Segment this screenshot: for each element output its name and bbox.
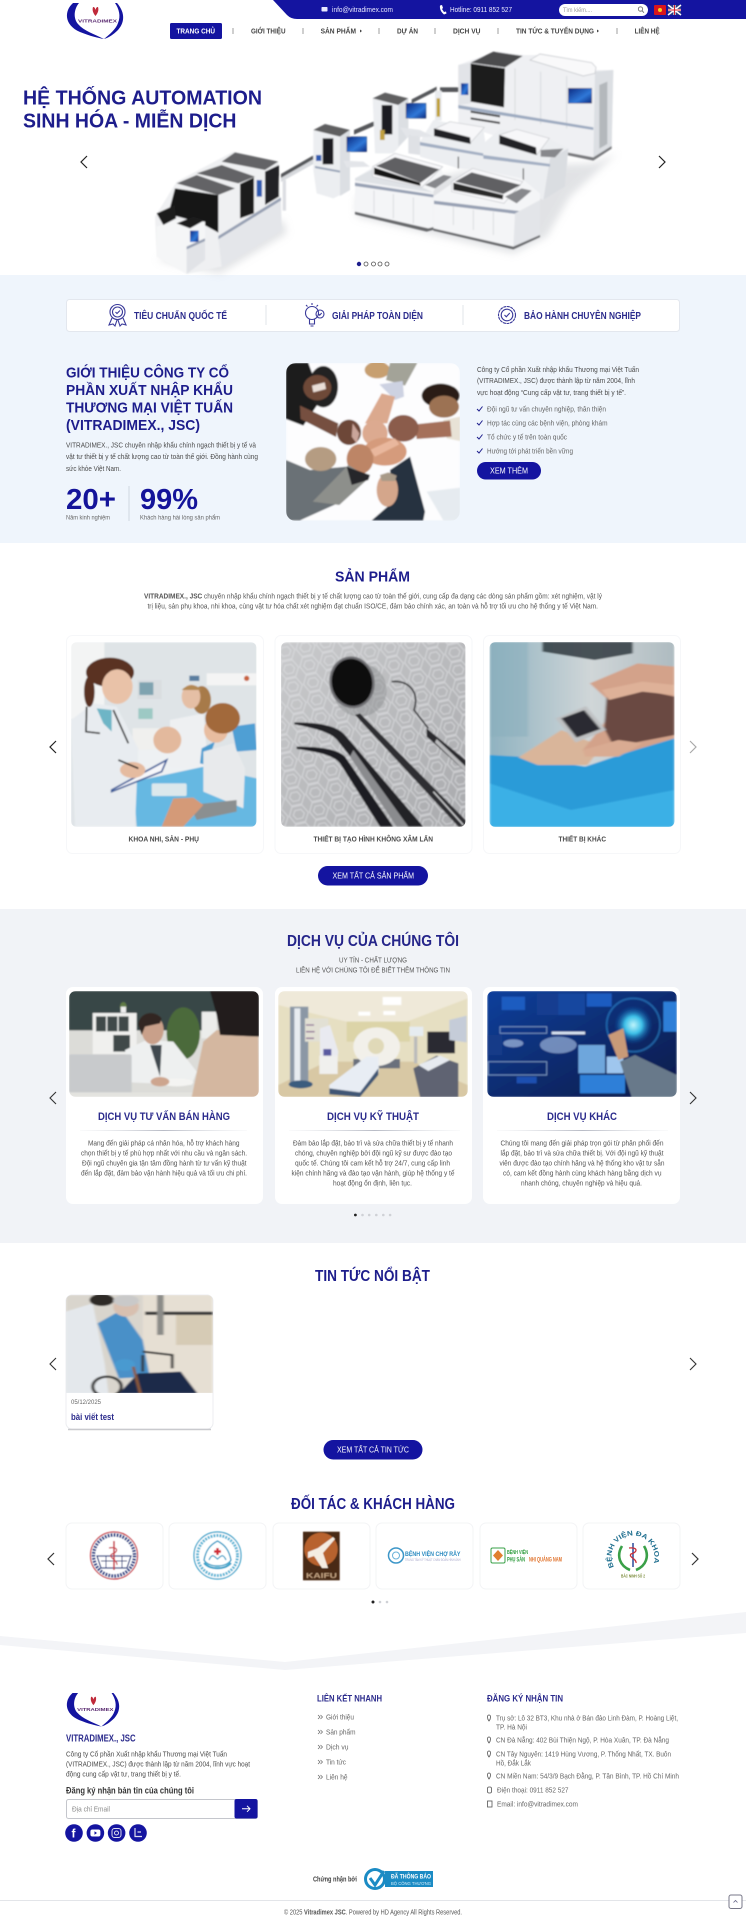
product card: other devices <box>484 636 680 854</box>
products description <box>144 592 602 610</box>
addresses: CN Đà Nẵng: 402 Bùi Thiện Ngộ, P. Hòa Xuân, TP. Đà Nẵng <box>496 1736 669 1744</box>
service description <box>500 1138 665 1188</box>
rear analyzers <box>420 120 568 200</box>
icon: check badge <box>498 306 516 324</box>
about heading: (VITRADIMEX., JSC) <box>66 417 200 434</box>
addresses: TP. Hà Nội <box>496 1722 527 1732</box>
nav items <box>233 27 660 36</box>
headline <box>23 86 262 133</box>
company text <box>66 1750 251 1779</box>
company text: Công ty Cổ phần Xuất nhập khẩu Thương mại Việt Tuấn <box>66 1750 227 1759</box>
button: all news <box>324 1440 422 1460</box>
product label: THIẾT BỊ KHÁC <box>558 834 607 844</box>
service description: Mang đến giải pháp cá nhân hóa, hỗ trợ khách hàng <box>88 1138 240 1148</box>
about description: vật tư thiết bị y tế chất lượng cao từ toàn thế giới. Đồng hành cùng <box>66 452 258 461</box>
service description: quốc tế. Chúng tôi cam kết hỗ trợ 24/7, cung cấp linh <box>295 1158 450 1168</box>
service description: đến lắp đặt, đảm bảo vận hành hiệu quả và tối ưu chi phí. <box>81 1168 247 1178</box>
about right column text: Công ty Cổ phần Xuất nhập khẩu Thương mại Việt Tuấn <box>477 365 639 374</box>
about heading: PHẦN XUẤT NHẬP KHẨU <box>66 381 233 399</box>
service description: Đội ngũ chuyên gia tận tâm đồng hành từ tư vấn kỹ thuật <box>82 1158 247 1168</box>
service title: DỊCH VỤ KỸ THUẬT <box>327 1110 419 1123</box>
stat: 99% satisfied: Khách hàng hài lòng sản phẩm <box>140 514 220 522</box>
footer company column <box>65 1693 258 1842</box>
icon: award ribbon <box>109 304 126 326</box>
about description: sức khỏe Việt Nam. <box>66 464 121 473</box>
about checklist: Tổ chức y tế trên toàn quốc <box>487 433 567 442</box>
products heading: SẢN PHẨM <box>335 568 410 586</box>
service description: có, cam kết đồng hành cùng khách hàng bằng dịch vụ <box>503 1168 662 1178</box>
logo: KAIFU: KAIFU <box>306 1573 337 1580</box>
service card: sales consulting <box>66 987 263 1204</box>
products description: VITRADIMEX., JSC chuyên nhập khẩu chính ngạch thiết bị y tế chất lượng cao từ toàn thế giới, cung cấp đa dạng các dòng sản phẩm gồm: xét nghiệm, vật lý <box>144 592 602 600</box>
addresses: Trụ sở: Lô 32 BT3, Khu nhà ở Bán đảo Linh Đàm, P. Hoàng Liệt, <box>496 1714 678 1722</box>
logo: obstetrics and pediatrics Quang Nam: NHI QUẢNG NAM <box>529 1554 562 1564</box>
nav items: LIÊN HỆ <box>635 27 660 36</box>
addresses: Điện thoại: 0911 852 527 <box>497 1786 568 1794</box>
floor shadows <box>157 153 617 273</box>
about heading: GIỚI THIỆU CÔNG TY CỔ <box>66 364 229 382</box>
company text: (VITRADIMEX., JSC) được thành lập từ năm 2004, lĩnh vực hoạt <box>66 1760 251 1769</box>
service description: kiện chính hãng và đào tạo vận hành, giúp hệ thống y tế <box>292 1168 455 1178</box>
photo: consultation <box>69 991 259 1097</box>
addresses: Hồ, Đắk Lắk <box>496 1758 531 1768</box>
icon: mail <box>322 7 328 12</box>
certification: Chứng nhận bởi <box>313 1876 357 1884</box>
logo: Cho Ray hospital: TRUNG TÂM KỸ THUẬT CHẨN ĐOÁN HÌNH ẢNH <box>405 1557 461 1562</box>
news heading: TIN TỨC NỔI BẬT <box>315 1266 430 1285</box>
carousel arrows: products <box>50 741 696 753</box>
nav items: SẢN PHẨM <box>321 27 356 36</box>
certification badge <box>364 1868 433 1890</box>
service title: DỊCH VỤ KHÁC <box>547 1110 617 1123</box>
active nav item: TRANG CHỦ <box>176 27 215 36</box>
carousel arrows: services <box>50 1092 696 1104</box>
logo: hospital 1 <box>90 1532 138 1579</box>
icons: locations <box>488 1715 492 1807</box>
about checklist: Đội ngũ tư vấn chuyên nghiệp, thân thiện <box>487 405 606 414</box>
search box: Tìm kiếm.... <box>563 8 592 14</box>
photo: CT scan room <box>278 991 468 1097</box>
certification badge: BỘ CÔNG THƯƠNG <box>391 1880 431 1886</box>
logo: obstetrics and pediatrics Quang Nam: BỆNH VIỆN <box>507 1548 528 1556</box>
footer logo: VITRADIMEX <box>77 1707 114 1712</box>
link list: Sản phẩm <box>326 1728 356 1737</box>
newsletter heading: Đăng ký nhận bản tin của chúng tôi <box>66 1786 194 1796</box>
partner cards row <box>66 1522 680 1590</box>
photo: doctor with child <box>71 642 257 827</box>
link list <box>326 1713 356 1782</box>
service description <box>81 1138 247 1178</box>
services pagination dots <box>354 1214 391 1216</box>
email: info@vitradimex.com <box>332 5 393 14</box>
service title: DỊCH VỤ TƯ VẤN BÁN HÀNG <box>98 1110 230 1123</box>
photo: digital dashboard <box>487 991 677 1097</box>
about checklist <box>477 405 608 456</box>
addresses: CN Miền Nam: 54/3/9 Bạch Đằng, P. Tân Bình, TP. Hồ Chí Minh <box>496 1772 679 1780</box>
stat: 99% satisfied: 99% <box>140 484 198 516</box>
front analyzer C <box>355 153 452 232</box>
newsletter input <box>66 1799 258 1818</box>
addresses: CN Tây Nguyên: 1419 Hùng Vương, P. Thống Nhất, TX. Buôn <box>496 1750 671 1758</box>
hero machines illustration <box>155 52 617 274</box>
tower B <box>373 93 440 155</box>
logo: Cho Ray hospital: BỆNH VIỆN CHỢ RẪY <box>405 1549 461 1558</box>
button: all products <box>318 866 428 886</box>
headline: HỆ THỐNG AUTOMATION <box>23 86 262 110</box>
top contact band <box>273 0 746 19</box>
date: 05/12/2025 <box>71 1399 101 1406</box>
social icons <box>65 1824 147 1842</box>
logo: obstetrics and pediatrics Quang Nam: PHỤ SẢN <box>507 1554 525 1564</box>
product card: pediatrics <box>66 636 264 854</box>
photo: nurse with patient <box>66 1294 213 1397</box>
link list: Giới thiệu <box>326 1713 354 1722</box>
front analyzer D <box>433 168 540 249</box>
link list: Liên hệ <box>326 1773 348 1782</box>
services heading <box>287 931 459 975</box>
footer quick links <box>317 1692 382 1782</box>
column title: LIÊN KẾT NHANH <box>317 1692 382 1703</box>
about heading <box>66 364 233 434</box>
icon: bulb <box>306 303 324 326</box>
company text: động cung cấp vật tư, trang thiết bị y tế. <box>66 1770 181 1779</box>
product label: THIẾT BỊ TẠO HÌNH KHÔNG XÂM LẤN <box>314 834 433 844</box>
partners pagination dots <box>372 1600 388 1604</box>
logo: KAIFU <box>303 1532 340 1580</box>
stat: 99% satisfied <box>140 484 220 522</box>
about right column text: (VITRADIMEX., JSC) được thành lập từ năm 2004, lĩnh <box>477 376 635 385</box>
company name: VITRADIMEX., JSC <box>66 1734 136 1744</box>
addresses <box>496 1714 679 1808</box>
logo: Bac Ninh general hospital: BẮC NINH SỐ 2 <box>621 1572 645 1578</box>
product label: KHOA NHI, SẢN - PHỤ <box>128 835 199 844</box>
feature text: BẢO HÀNH CHUYÊN NGHIỆP <box>524 309 641 322</box>
service description: nhanh chóng, chuyên nghiệp và hiệu quả. <box>521 1180 642 1188</box>
active nav item <box>170 23 222 39</box>
link list: Tin tức <box>326 1758 346 1767</box>
nav items: TIN TỨC & TUYỂN DỤNG <box>516 27 594 36</box>
flag: UK <box>668 5 681 15</box>
feature text: GIẢI PHÁP TOÀN DIỆN <box>332 309 423 322</box>
photo: instruments <box>281 642 466 827</box>
nav items: DỊCH VỤ <box>453 27 480 36</box>
service description: chọn thiết bị y tế phù hợp nhất với nhu cầu và ngân sách. <box>81 1148 247 1158</box>
service description: Chúng tôi mang đến giải pháp trọn gói từ phân phối đến <box>500 1138 664 1148</box>
logo: obstetrics and pediatrics Quang Nam <box>491 1548 562 1564</box>
button: see more <box>477 462 541 480</box>
logo: VITRADIMEX <box>78 18 117 24</box>
tower A <box>313 124 370 198</box>
social icons: f <box>72 1826 76 1840</box>
feature text: TIÊU CHUẨN QUỐC TẾ <box>134 308 227 322</box>
logo <box>67 3 123 39</box>
product card: non-invasive shaping device <box>275 636 472 854</box>
carousel arrows: partners <box>48 1553 698 1565</box>
newsletter input: Địa chỉ Email <box>72 1806 110 1814</box>
service card: technical <box>275 987 472 1204</box>
nav items: GIỚI THIỆU <box>251 27 286 36</box>
stat: 20+ years: 20+ <box>66 484 116 516</box>
main navigation <box>170 23 660 39</box>
photo: smartwatch <box>490 642 675 827</box>
footer contact <box>487 1692 679 1808</box>
news card <box>66 1294 213 1430</box>
about right column text <box>477 365 639 397</box>
about right column text: vực hoạt động “Cung cấp vật tư, trang thiết bị y tế”. <box>477 388 626 397</box>
services heading: DỊCH VỤ CỦA CHÚNG TÔI <box>287 931 459 950</box>
products description: trị liệu, sản phụ khoa, nhi khoa, cùng vật tư hóa chất xét nghiệm đạt chuẩn ISO/CE, đảm bảo chính xác, an toàn và hỗ trợ tối ưu cho hệ thống y tế Việt Nam. <box>148 602 598 610</box>
nav items: DỰ ÁN <box>397 27 418 36</box>
photo: team fist bump <box>286 362 460 520</box>
about description: VITRADIMEX., JSC chuyên nhập khẩu chính ngạch thiết bị y tế và <box>66 440 257 450</box>
about heading: THƯƠNG MẠI VIỆT TUẤN <box>66 398 233 416</box>
big rear analyzer <box>458 52 613 161</box>
services heading: UY TÍN - CHẤT LƯỢNG <box>339 955 407 965</box>
icon: phone <box>440 5 446 14</box>
service description: Đảm bảo lắp đặt, bảo trì và sửa chữa thiết bị y tế nhanh <box>293 1138 453 1148</box>
chevrons <box>318 1715 322 1779</box>
service description: lắp đặt, bảo trì và sửa chữa thiết bị. Với đội ngũ kỹ thuật <box>500 1148 664 1158</box>
flag: Vietnam <box>654 5 666 15</box>
logo: Bac Ninh general hospital: BỆNH VIỆN ĐA KHOA <box>606 1530 659 1568</box>
conveyor belts <box>281 87 458 211</box>
news title: bài viết test <box>71 1412 114 1422</box>
feature bar <box>66 300 680 332</box>
column title: ĐĂNG KÝ NHẬN TIN <box>487 1692 563 1703</box>
logo: Cho Ray hospital <box>388 1548 461 1563</box>
certification badge: ĐÃ THÔNG BÁO <box>391 1872 431 1880</box>
about checklist: Hợp tác cùng các bệnh viện, phòng khám <box>487 419 608 428</box>
headline: SINH HÓA - MIỄN DỊCH <box>23 109 236 133</box>
hero arrows <box>81 156 665 168</box>
about description <box>66 440 258 473</box>
partners heading: ĐỐI TÁC & KHÁCH HÀNG <box>291 1493 455 1513</box>
button: all news: XEM TẤT CẢ TIN TỨC <box>337 1444 409 1454</box>
footer logo <box>67 1693 119 1726</box>
hero banner <box>23 52 665 274</box>
service description: viên được đào tạo chính hãng và hệ thống kho vật tư sẵn <box>500 1158 665 1168</box>
service description: chóng, chuyên nghiệp bởi đội ngũ kỹ sư được đào tạo <box>295 1150 452 1158</box>
service description <box>292 1138 455 1188</box>
sample loader machine <box>155 152 282 274</box>
button: see more: XEM THÊM <box>490 466 528 476</box>
certification <box>313 1868 433 1890</box>
link list: Dịch vụ <box>326 1743 348 1752</box>
button: all products: XEM TẤT CẢ SẢN PHẨM <box>332 870 414 880</box>
service description: hoạt động ổn định, liên tục. <box>333 1180 412 1188</box>
about checklist: Hướng tới phát triển bền vững <box>487 447 573 456</box>
back to top button <box>729 1895 742 1908</box>
search box <box>559 4 648 16</box>
carousel arrows: news <box>50 1358 696 1370</box>
logo: hospital 2 <box>194 1532 241 1579</box>
stat: 20+ years: Năm kinh nghiệm <box>66 514 110 522</box>
hotline: Hotline: 0911 852 527 <box>450 5 512 14</box>
service card: other <box>483 987 680 1204</box>
services heading: LIÊN HỆ VỚI CHÚNG TÔI ĐỂ BIẾT THÊM THÔNG TIN <box>296 965 450 975</box>
copyright: © 2025 Vitradimex JSC. Powered by HD Agency All Rights Reserved. <box>284 1908 462 1916</box>
hero dots <box>357 262 389 266</box>
addresses: Email: info@vitradimex.com <box>497 1800 578 1808</box>
